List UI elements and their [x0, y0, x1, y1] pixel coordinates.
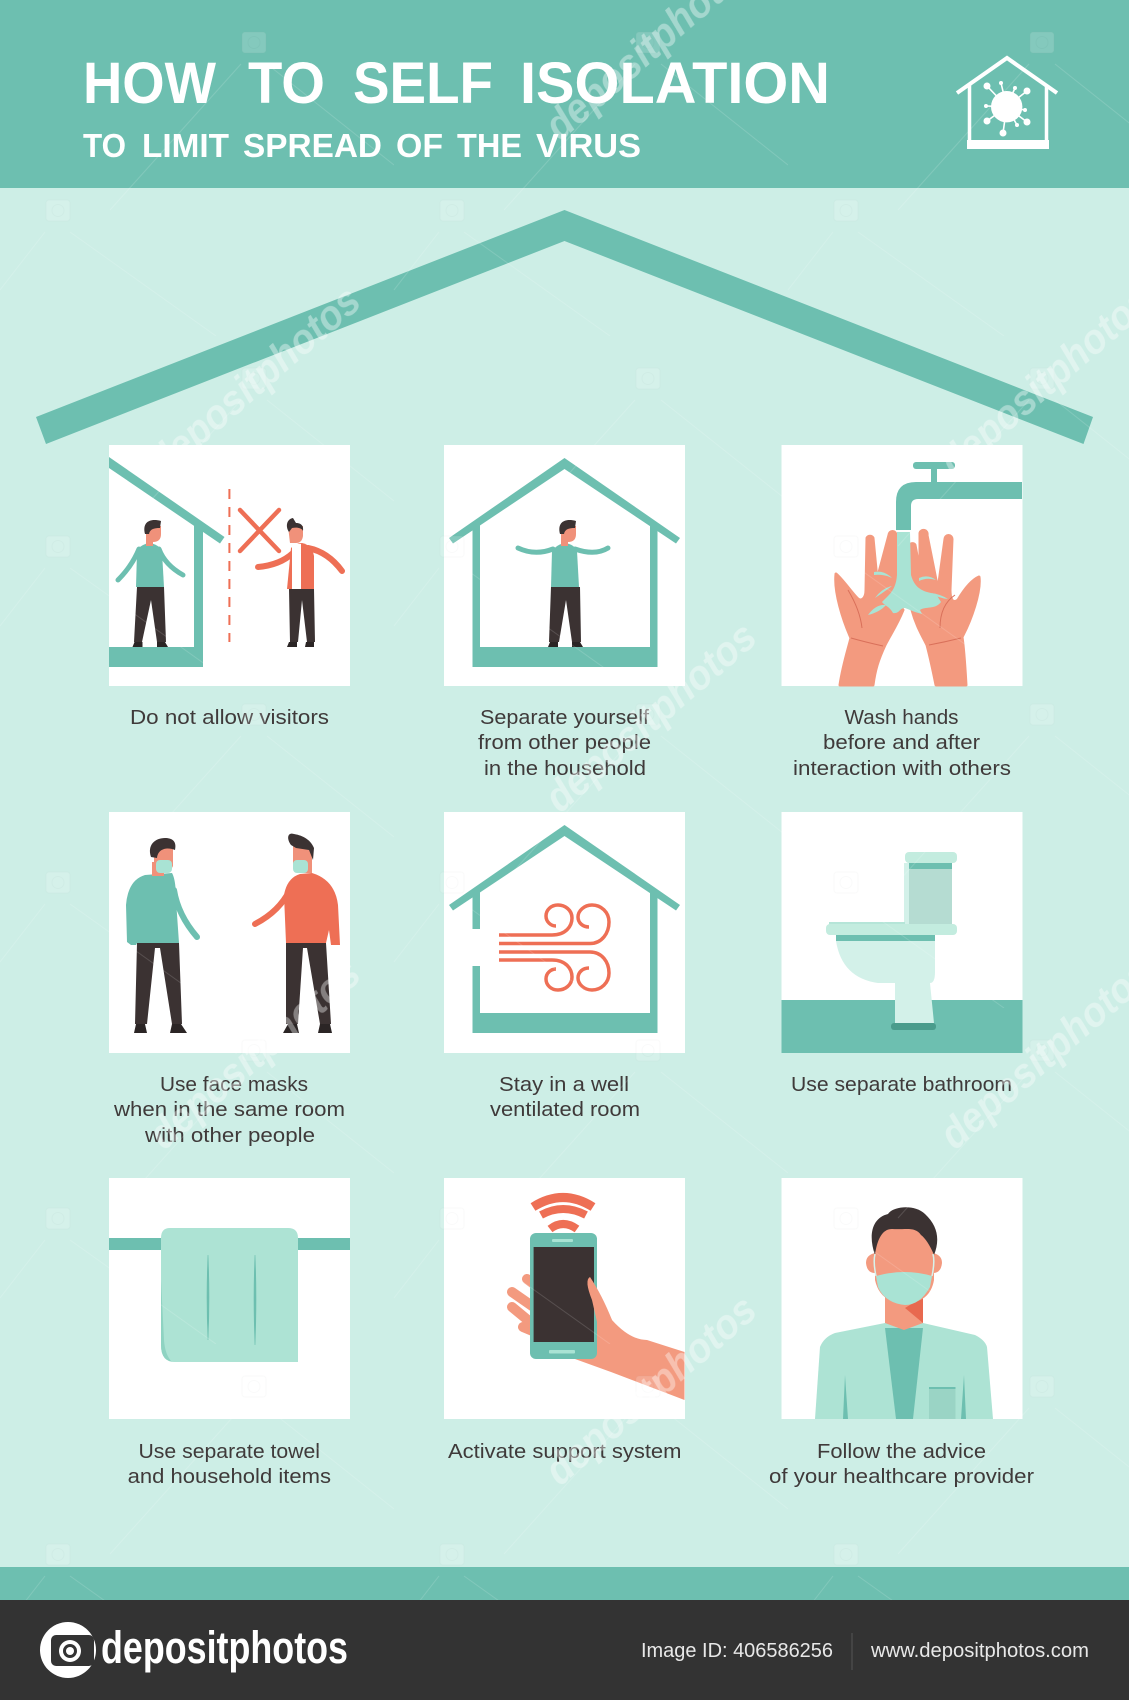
- title: [83, 51, 830, 116]
- subtitle: LIMIT: [142, 127, 229, 164]
- caption: face masks: Use face masks: [160, 1074, 308, 1096]
- floor: [782, 1000, 1022, 1053]
- subtitle: THE: [457, 127, 522, 164]
- caption: ventilated room: Stay in a well: [499, 1074, 629, 1096]
- towel: [161, 1228, 298, 1362]
- caption: face masks: with other people: [144, 1125, 315, 1147]
- icon: wifi signal: [533, 1198, 593, 1229]
- image id: Image ID: 406586256: [641, 1640, 833, 1662]
- icon: house with virus: [957, 58, 1057, 149]
- panel: separate yourself: [444, 445, 685, 686]
- watermark text: [139, 0, 1129, 1494]
- caption: separate yourself: in the household: [484, 758, 646, 780]
- person with arms out: [518, 520, 608, 647]
- subtitle: TO: [83, 127, 126, 164]
- person with mask, orange sweater: [255, 834, 340, 1033]
- caption: do not allow visitors: Do not allow visitors: [130, 707, 329, 729]
- caption: support system: Activate support system: [448, 1441, 682, 1463]
- faucet: [896, 462, 1022, 530]
- caption: healthcare provider: of your healthcare provider: [769, 1466, 1034, 1488]
- subtitle: [83, 127, 641, 164]
- logo mark: [40, 1622, 96, 1678]
- caption: wash hands: Wash hands: [844, 707, 958, 729]
- panel: separate towel: [109, 1178, 350, 1419]
- caption: separate bathroom: Use separate bathroom: [791, 1074, 1012, 1096]
- hand and forearm: [575, 1277, 684, 1400]
- caption: face masks: [113, 1074, 345, 1147]
- phone: [530, 1233, 597, 1359]
- house outline: [449, 458, 680, 667]
- caption: separate yourself: [478, 707, 651, 780]
- caption: face masks: when in the same room: [113, 1099, 345, 1121]
- title: ISOLATION: [520, 51, 830, 116]
- website: www.depositphotos.com: [870, 1640, 1089, 1662]
- house with window gap: [449, 825, 680, 1033]
- panel: face masks: [109, 812, 350, 1053]
- caption: separate towel: [128, 1441, 331, 1488]
- watermark text: depositphotos: [535, 612, 765, 821]
- title: HOW: [83, 51, 216, 116]
- title: TO: [248, 51, 325, 116]
- icon: toilet: [826, 852, 957, 1030]
- caption: healthcare provider: [769, 1441, 1034, 1488]
- hands: [836, 530, 979, 685]
- subtitle: SPREAD: [243, 127, 382, 164]
- caption: ventilated room: [490, 1074, 640, 1121]
- title: SELF: [353, 51, 493, 116]
- person outside: [258, 518, 342, 647]
- coat pocket: [929, 1387, 956, 1419]
- caption: separate yourself: from other people: [478, 732, 651, 754]
- hair: [872, 1207, 937, 1255]
- water splash: [868, 532, 948, 615]
- caption: wash hands: before and after: [823, 732, 980, 754]
- coat arm folds: [843, 1375, 966, 1419]
- subtitle: OF: [396, 127, 443, 164]
- coat: [815, 1323, 993, 1419]
- caption: separate yourself: Separate yourself: [480, 707, 649, 729]
- house section: [109, 457, 224, 667]
- logo wordmark: depositphotos: [101, 1622, 348, 1673]
- panel: healthcare provider: [782, 1178, 1022, 1419]
- caption: separate towel: and household items: [128, 1466, 331, 1488]
- panel: do not allow visitors: [109, 445, 350, 686]
- dashed boundary line: [228, 489, 230, 642]
- header band: [0, 0, 1129, 188]
- panel: ventilated room: [444, 812, 685, 1053]
- caption: healthcare provider: Follow the advice: [817, 1441, 986, 1463]
- panel: support system: [444, 1178, 685, 1419]
- face: [875, 1228, 934, 1303]
- fingers behind phone: [512, 1279, 535, 1332]
- caption: ventilated room: ventilated room: [490, 1099, 640, 1121]
- caption: wash hands: [793, 707, 1011, 780]
- towel rail: [109, 1238, 350, 1250]
- panel: separate bathroom: [782, 812, 1022, 1053]
- thumb: [587, 1277, 612, 1335]
- neck and chest: [885, 1297, 923, 1330]
- icon: red cross: [240, 510, 279, 551]
- shirt: [885, 1328, 923, 1419]
- watermark text: depositphotos: [535, 1285, 765, 1494]
- large roof: [36, 210, 1093, 444]
- person with mask, teal sweater: [126, 838, 197, 1033]
- bottom teal band: [0, 1567, 1129, 1600]
- person inside: [118, 520, 183, 647]
- panel: wash hands: [782, 445, 1022, 686]
- icon: wind: [499, 905, 609, 990]
- caption: wash hands: interaction with others: [793, 758, 1011, 780]
- footer bar: [0, 1600, 1129, 1700]
- subtitle: VIRUS: [536, 127, 641, 164]
- ears: [866, 1253, 942, 1273]
- caption: separate towel: Use separate towel: [138, 1441, 320, 1463]
- watermark text: depositphotos: [139, 949, 369, 1158]
- watermark text: depositphotos: [139, 276, 369, 485]
- face mask: [874, 1254, 934, 1305]
